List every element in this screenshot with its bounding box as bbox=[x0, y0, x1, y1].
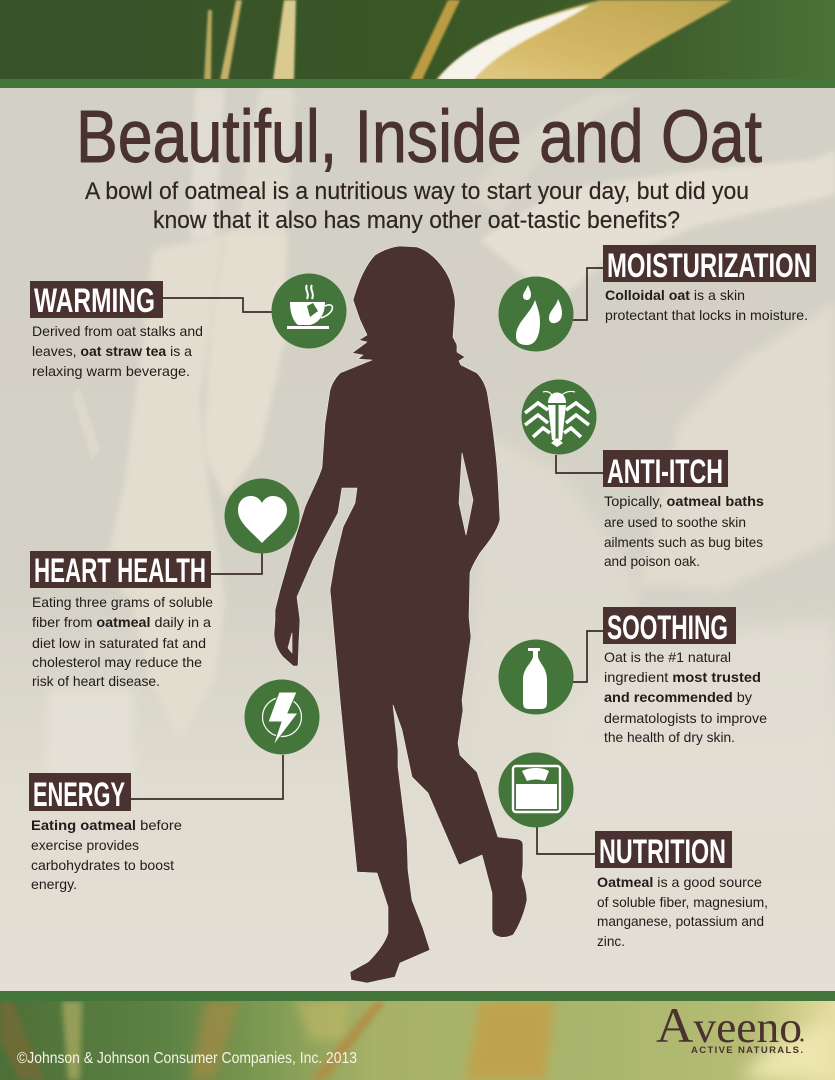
anti-itch text: Topically, oatmeal baths bbox=[604, 493, 764, 509]
nutrition text: of soluble fiber, magnesium, bbox=[597, 894, 768, 910]
nutrition connector bbox=[537, 827, 595, 854]
nutrition label: NUTRITION bbox=[599, 833, 726, 871]
anti-itch connector bbox=[556, 455, 603, 473]
warming text: leaves, oat straw tea is a bbox=[32, 343, 192, 359]
panel: heart health bbox=[30, 478, 300, 689]
panel: soothing bbox=[498, 607, 767, 745]
moisturization text bbox=[605, 287, 808, 323]
soothing connector bbox=[573, 631, 603, 682]
heart health connector bbox=[210, 553, 262, 574]
green bar: top bbox=[0, 79, 835, 88]
copyright: ©Johnson & Johnson Consumer Companies, Inc. 2013 bbox=[17, 1050, 357, 1067]
panel: warming bbox=[30, 274, 346, 379]
nutrition text bbox=[597, 874, 768, 949]
heart health text: fiber from oatmeal daily in a bbox=[32, 614, 211, 630]
soothing text: dermatologists to improve bbox=[604, 710, 767, 726]
soothing text: the health of dry skin. bbox=[604, 729, 735, 745]
anti-itch text: and poison oak. bbox=[604, 553, 700, 569]
woman silhouette bbox=[274, 246, 527, 983]
anti-itch text bbox=[604, 493, 764, 569]
green bar: bottom bbox=[0, 991, 835, 1001]
Aveeno logo: ACTIVE NATURALS. bbox=[691, 1045, 803, 1056]
soothing text: and recommended by bbox=[604, 689, 752, 705]
nutrition label bbox=[595, 831, 732, 871]
nutrition text: Oatmeal is a good source bbox=[597, 874, 762, 890]
moisturization text: Colloidal oat is a skin bbox=[605, 287, 745, 303]
warming text: Derived from oat stalks and bbox=[32, 323, 203, 339]
panel: nutrition bbox=[498, 752, 768, 949]
heart health text: cholesterol may reduce the bbox=[32, 654, 202, 670]
anti-itch text: are used to soothe skin bbox=[604, 514, 746, 530]
soothing label bbox=[603, 607, 736, 647]
nutrition text: zinc. bbox=[597, 933, 625, 949]
panel: energy bbox=[29, 680, 320, 892]
nutrition text: manganese, potassium and bbox=[597, 913, 764, 929]
bug icon bbox=[522, 380, 596, 454]
heart health label bbox=[30, 551, 211, 590]
panel: moisturization bbox=[498, 245, 816, 352]
moisturization text: protectant that locks in moisture. bbox=[605, 307, 808, 323]
anti-itch text: ailments such as bug bites bbox=[604, 534, 763, 550]
warming label: WARMING bbox=[34, 282, 155, 320]
warming icon bbox=[272, 274, 346, 348]
top photo band bbox=[0, 0, 835, 80]
energy text: energy. bbox=[31, 876, 77, 892]
moisturization connector bbox=[573, 268, 603, 320]
subtitle bbox=[85, 178, 749, 234]
heart health label: HEART HEALTH bbox=[34, 552, 206, 590]
energy label bbox=[29, 773, 131, 814]
scale icon bbox=[498, 752, 574, 828]
heart health text: risk of heart disease. bbox=[32, 673, 160, 689]
energy text: carbohydrates to boost bbox=[31, 857, 174, 873]
anti-itch label: ANTI-ITCH bbox=[607, 453, 723, 491]
energy text bbox=[31, 817, 182, 892]
soothing label: SOOTHING bbox=[607, 609, 728, 647]
heart health text: diet low in saturated fat and bbox=[32, 635, 206, 651]
energy connector bbox=[131, 755, 283, 799]
soothing text bbox=[604, 649, 767, 745]
panel: anti-itch bbox=[522, 380, 764, 569]
anti-itch label bbox=[603, 450, 728, 491]
heart health text: Eating three grams of soluble bbox=[32, 594, 213, 610]
heart health text bbox=[32, 594, 213, 689]
energy label: ENERGY bbox=[33, 776, 125, 814]
drops icon bbox=[498, 276, 574, 352]
Aveeno logo: Aveeno bbox=[656, 997, 802, 1053]
soothing text: ingredient most trusted bbox=[604, 669, 761, 685]
energy icon bbox=[244, 680, 320, 754]
subtitle: A bowl of oatmeal is a nutritious way to start your day, but did you bbox=[85, 178, 749, 205]
energy text: Eating oatmeal before bbox=[31, 817, 182, 833]
soothing text: Oat is the #1 natural bbox=[604, 649, 731, 665]
warming text bbox=[32, 323, 203, 379]
energy text: exercise provides bbox=[31, 837, 139, 853]
lotion bottle icon bbox=[498, 640, 574, 714]
heart icon bbox=[224, 478, 300, 554]
subtitle: know that it also has many other oat-tastic benefits? bbox=[153, 207, 680, 234]
warming text: relaxing warm beverage. bbox=[32, 363, 190, 379]
warming connector bbox=[163, 298, 272, 312]
bottom photo band bbox=[0, 1001, 835, 1080]
